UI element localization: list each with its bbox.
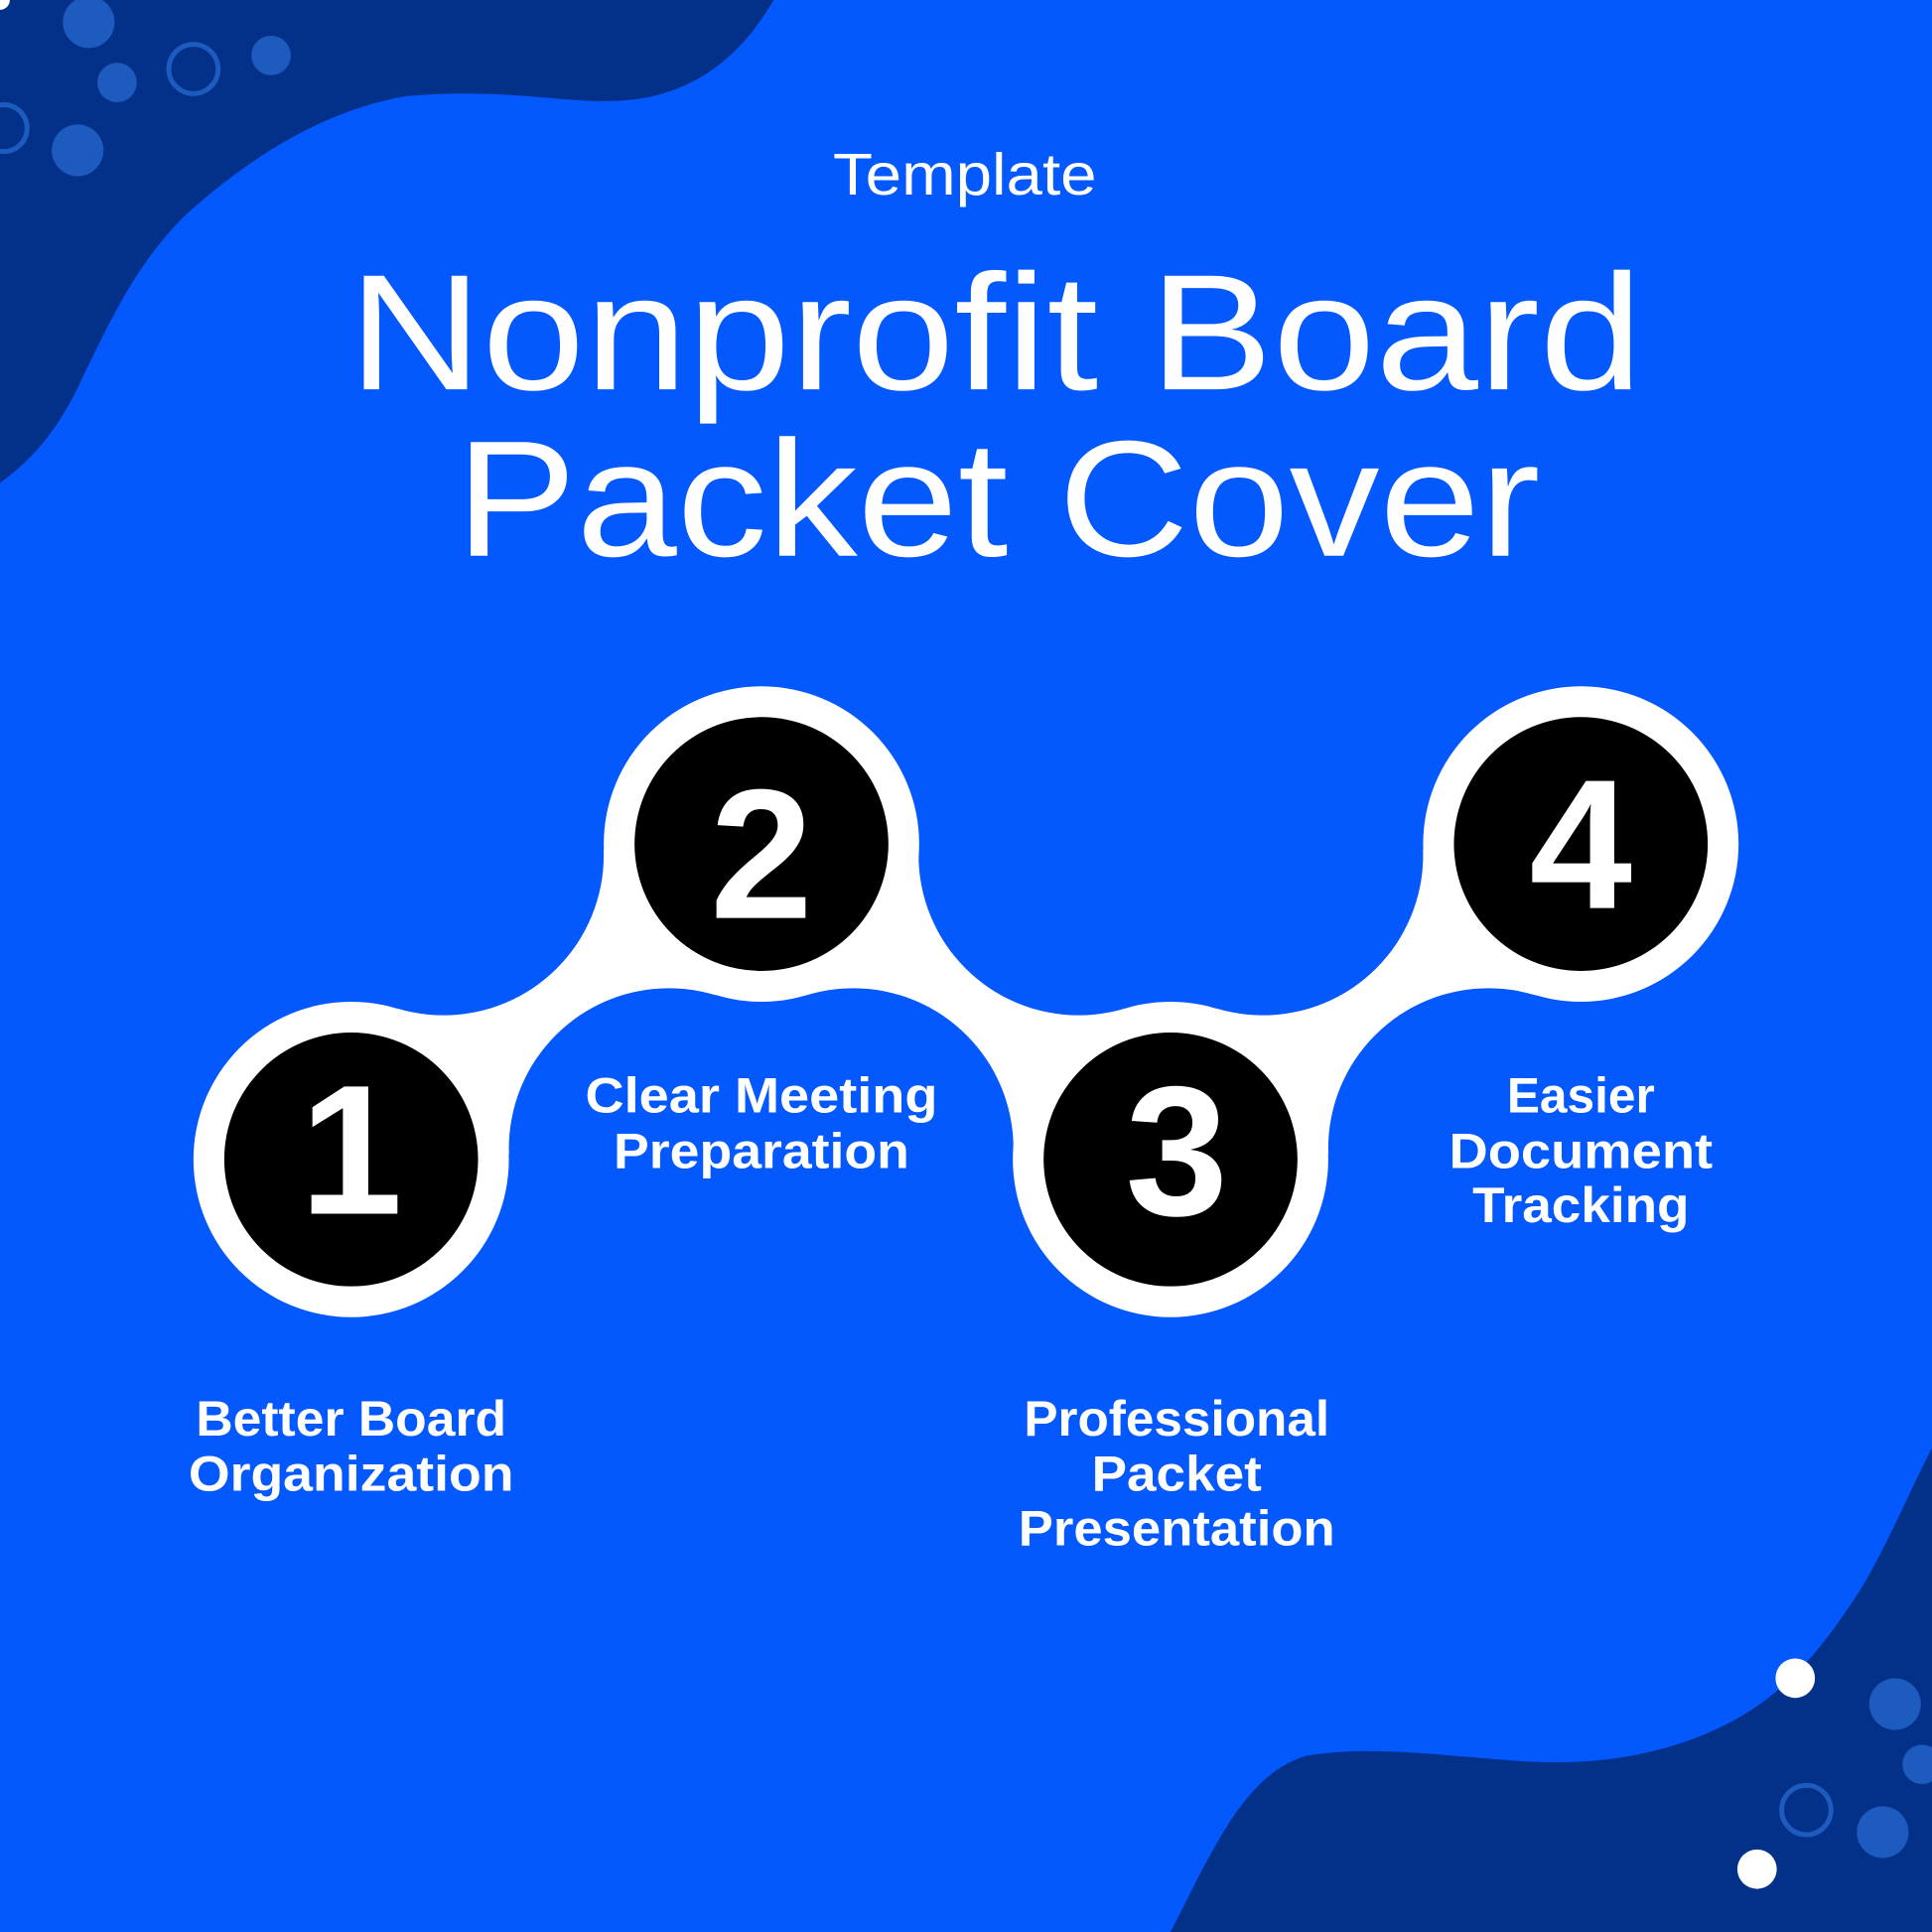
title: Nonprofit Board — [348, 240, 1642, 425]
step chain — [194, 686, 1738, 1317]
title: Packet Cover — [456, 407, 1540, 592]
step 3 circle: 3 — [1125, 1048, 1228, 1255]
label 4: Easier — [1507, 1068, 1655, 1124]
label 2: Clear Meeting — [586, 1068, 937, 1124]
label 4: Document — [1449, 1124, 1713, 1179]
decoration: top-left dark wave — [0, 0, 773, 483]
step 2 circle — [604, 686, 919, 1002]
step 4 circle: 4 — [1530, 742, 1632, 948]
label 2: Preparation — [614, 1124, 909, 1179]
label 4: Tracking — [1472, 1177, 1690, 1233]
label 3: Packet — [1092, 1447, 1262, 1502]
label 3: Presentation — [1019, 1500, 1335, 1556]
step 1 circle: 1 — [300, 1046, 402, 1253]
label 1: Better Board — [196, 1391, 506, 1447]
label 3 — [1019, 1391, 1335, 1556]
label 1: Organization — [189, 1447, 514, 1502]
label 1 — [189, 1391, 514, 1502]
label 2 — [586, 1068, 937, 1179]
step 2 circle: 2 — [710, 752, 813, 958]
label 4 — [1449, 1068, 1713, 1233]
subtitle: Template — [833, 141, 1097, 207]
step 1 circle — [194, 1002, 509, 1317]
title — [348, 240, 1642, 592]
step 4 circle — [1423, 686, 1738, 1002]
label 3: Professional — [1024, 1391, 1329, 1447]
step 3 circle — [1013, 1002, 1328, 1317]
decoration: bottom-right dark wave — [1171, 1448, 1932, 1932]
